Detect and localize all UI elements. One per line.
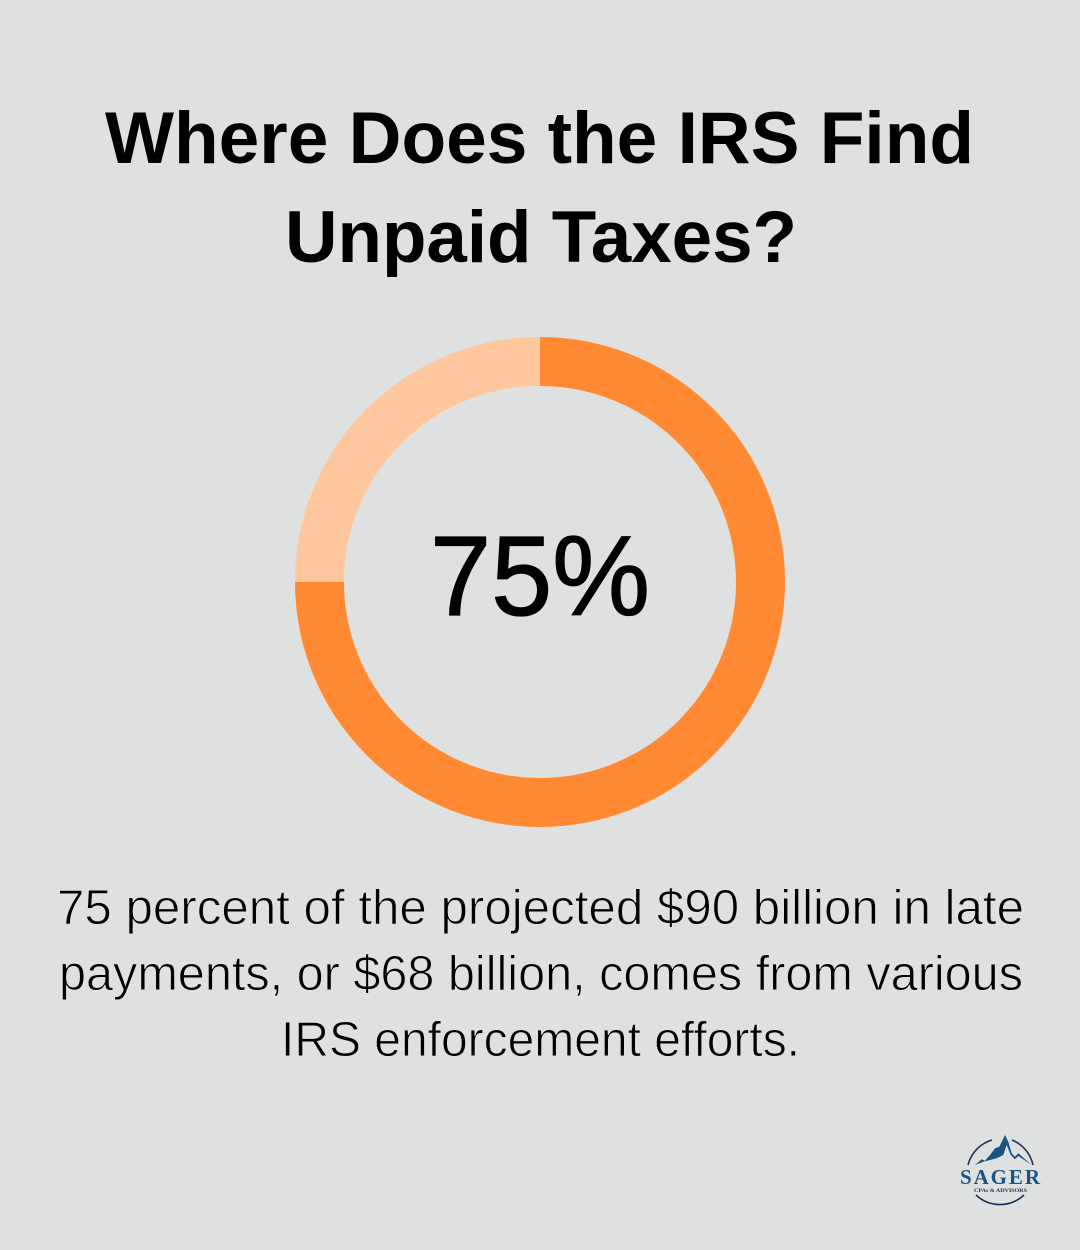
donut value: 75% (430, 513, 650, 639)
description text: payments, or $68 billion, comes from various (59, 947, 1023, 1001)
description text: IRS enforcement efforts. (281, 1013, 800, 1067)
logo wordmark: SAGER (960, 1165, 1041, 1189)
logo: Sager CPAs and Advisors (960, 1135, 1041, 1205)
description text: 75 percent of the projected $90 billion in late (57, 881, 1024, 935)
donut chart: 75 percent (320, 362, 760, 802)
title (105, 98, 974, 278)
logo mountain (975, 1135, 1032, 1165)
title: Unpaid Taxes? (285, 197, 797, 278)
description text (57, 881, 1024, 1067)
logo tagline: CPAs & ADVISORS (974, 1189, 1027, 1194)
logo ring (968, 1140, 1033, 1205)
title: Where Does the IRS Find (105, 98, 974, 179)
